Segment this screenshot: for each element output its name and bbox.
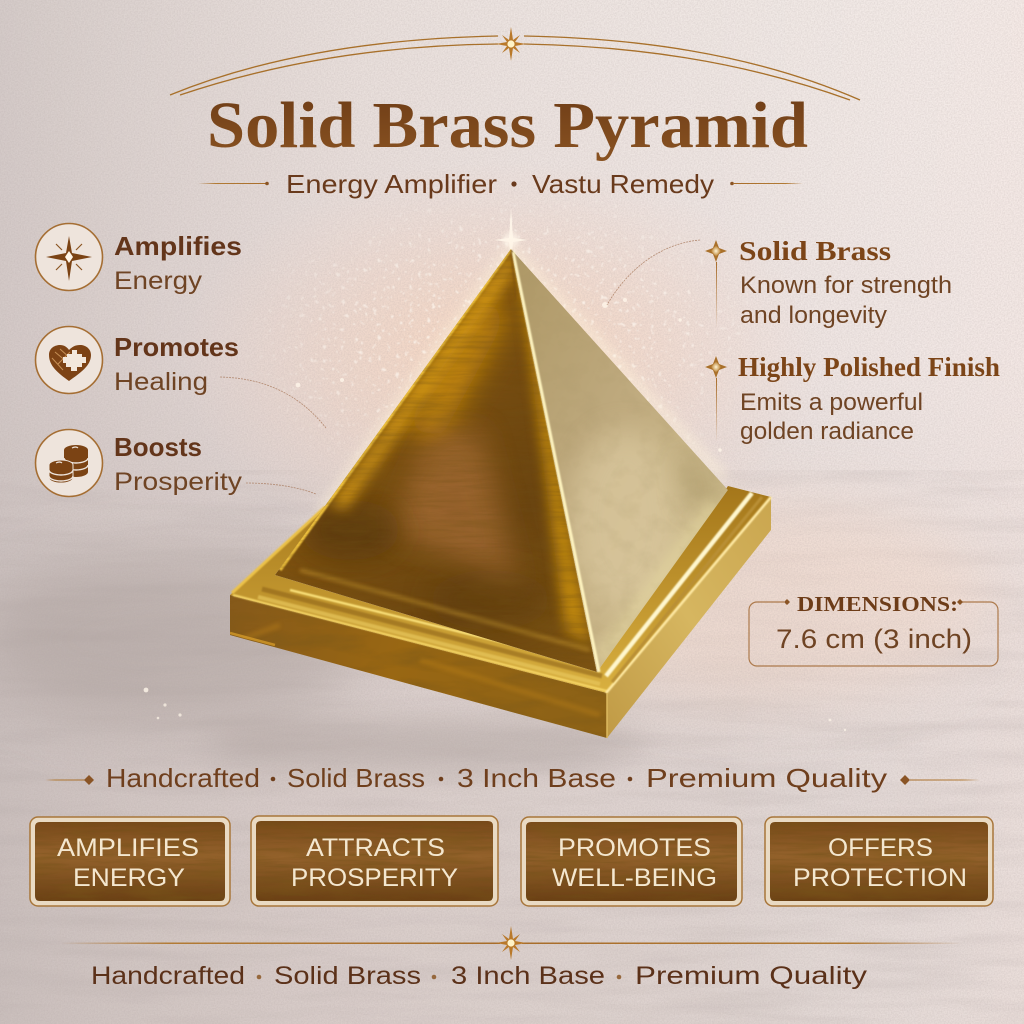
feature strip: 3 Inch Base [457, 763, 616, 793]
icon: diamond marker [705, 240, 727, 262]
feature: highly polished finish: Highly Polished Finish [738, 352, 1000, 382]
icon: four-point star [36, 224, 102, 290]
feature: highly polished finish: Emits a powerful [740, 389, 923, 416]
plate: offers protection: OFFERS [828, 834, 933, 862]
benefit: boosts prosperity [36, 430, 316, 496]
plate: promotes well-being: WELL-BEING [552, 864, 717, 892]
benefit: amplifies energy [36, 224, 242, 295]
title: Solid Brass Pyramid [207, 89, 808, 162]
footer strip: Premium Quality [635, 962, 868, 990]
feature: solid brass: and longevity [740, 302, 887, 329]
benefit: boosts prosperity: Boosts [114, 432, 202, 462]
benefit: promotes healing [36, 326, 326, 428]
benefit: boosts prosperity: Prosperity [114, 468, 243, 496]
dimensions box: DIMENSIONS: [797, 592, 958, 616]
plate: attracts prosperity [291, 834, 458, 892]
brass pyramid [225, 245, 771, 740]
plate: attracts prosperity: PROSPERITY [291, 864, 458, 892]
plate: amplifies energy [57, 834, 199, 892]
feature strip: Premium Quality [646, 763, 887, 793]
dimensions box [749, 592, 998, 666]
connector: solid brass [607, 240, 700, 305]
feature strip [45, 763, 980, 793]
feature: highly polished finish: golden radiance [740, 418, 914, 445]
icon: heart with puzzle piece [36, 326, 102, 394]
feature: solid brass: Solid Brass [739, 236, 891, 266]
feature: solid brass: Known for strength [740, 272, 952, 299]
subtitle: Vastu Remedy [532, 169, 714, 199]
feature strip: Solid Brass [287, 763, 425, 793]
plate: offers protection [793, 834, 967, 892]
top arc ornament [170, 27, 860, 100]
benefit: promotes healing: Healing [114, 368, 208, 396]
footer strip: Handcrafted [91, 962, 245, 990]
base slab [225, 486, 771, 740]
left face [270, 245, 600, 675]
plate: offers protection: PROTECTION [793, 864, 967, 892]
benefit: promotes healing: Promotes [114, 332, 239, 362]
plate: promotes well-being [552, 834, 717, 892]
subtitle [198, 169, 803, 199]
sparkles around pyramid [144, 170, 846, 731]
icon: coin stacks [36, 430, 102, 496]
pyramid glow [320, 249, 725, 515]
plate frames [30, 816, 993, 906]
front ridge highlight [513, 252, 599, 672]
plate: promotes well-being: PROMOTES [558, 834, 711, 862]
feature: solid brass [705, 236, 952, 329]
icon: diamond marker [705, 356, 727, 378]
rim highlights [233, 595, 607, 691]
benefit plates [30, 815, 995, 907]
plate: attracts prosperity: ATTRACTS [306, 834, 445, 862]
benefit: amplifies energy: Amplifies [114, 231, 242, 261]
bottom divider with star [60, 926, 962, 960]
right face [505, 245, 735, 675]
benefit: amplifies energy: Energy [114, 267, 203, 295]
plate: amplifies energy: AMPLIFIES [57, 834, 199, 862]
plate fills [35, 821, 988, 901]
footer strip [91, 962, 868, 990]
dimensions box: 7.6 cm (3 inch) [776, 624, 972, 654]
plate: amplifies energy: ENERGY [73, 864, 185, 892]
footer strip: Solid Brass [274, 962, 421, 990]
subtitle: Energy Amplifier [286, 169, 497, 199]
feature strip: Handcrafted [106, 763, 260, 793]
feature: highly polished finish [705, 352, 1000, 445]
footer strip: 3 Inch Base [451, 962, 605, 990]
